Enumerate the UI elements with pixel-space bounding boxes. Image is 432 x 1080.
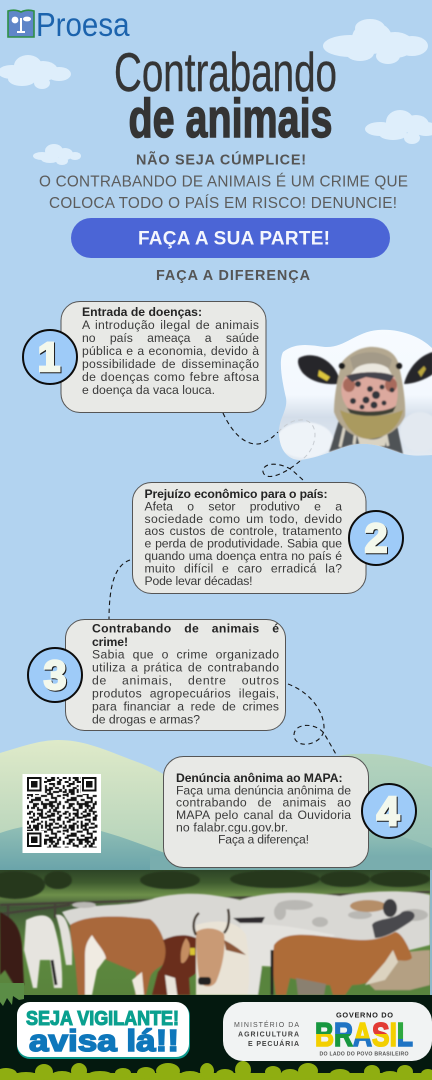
fence xyxy=(0,890,430,918)
text block: step 4: MAPA pelo canal da Ouvidoria xyxy=(176,808,351,822)
badge: number 1 xyxy=(23,330,77,384)
trees xyxy=(0,870,430,899)
badge: seja vigilante xyxy=(17,1002,190,1059)
snow xyxy=(277,422,333,458)
text block: step 3: Sabia que o crime organizado xyxy=(92,648,279,662)
photo: cow close-up xyxy=(279,330,432,460)
panel: step 4 xyxy=(164,756,368,868)
subtitle: O CONTRABANDO DE ANIMAIS É UM CRIME QUE xyxy=(39,174,408,190)
brown cow xyxy=(70,917,166,995)
badge: government logos: MINISTÉRIO DA xyxy=(234,1020,299,1029)
central cow xyxy=(196,921,249,995)
badge: number 4 xyxy=(362,784,416,838)
qr code xyxy=(22,774,101,853)
badge: number 2: 2 xyxy=(365,515,387,561)
text block: step 4: contrabando de animais ao xyxy=(176,796,351,810)
neck xyxy=(329,420,403,454)
back herd xyxy=(62,891,430,950)
text block: step 3: para financiar a rede de crimes xyxy=(92,700,279,714)
dashed connector: step 2 to step 3 xyxy=(109,560,130,620)
panel: step 2 xyxy=(132,482,366,594)
badge: seja vigilante: avisa lá!! xyxy=(29,1023,179,1058)
subtitle: NÃO SEJA CÚMPLICE! xyxy=(136,150,306,168)
badge: number 2 xyxy=(349,511,403,565)
badge: number 3 xyxy=(28,648,82,702)
text block: step 4: Faça a diferença! xyxy=(218,833,309,847)
text block: step 4 xyxy=(176,771,351,847)
badge: number 3: 3 xyxy=(44,652,66,698)
subtitle: COLOCA TODO O PAÍS EM RISCO! DENUNCIE! xyxy=(49,195,397,212)
text block: step 1 xyxy=(82,305,259,397)
text block: step 1: no país ameaça a saúde xyxy=(82,331,259,345)
foreground brown cow xyxy=(273,932,412,995)
badge: government logos: DO LADO DO POVO BRASILEIRO xyxy=(320,1052,408,1058)
dashed connector: step 1 to step 2 xyxy=(223,413,303,480)
badge: seja vigilante: SEJA VIGILANTE! xyxy=(26,1008,179,1030)
dark brown left cow xyxy=(0,912,24,985)
white cow behind xyxy=(240,924,335,995)
dark red cow xyxy=(152,935,198,995)
button: faça a sua parte xyxy=(71,218,390,258)
panel: step 1 xyxy=(61,302,266,412)
cloud: top left xyxy=(0,55,71,89)
logo: Brasil: BRASIL xyxy=(315,1016,413,1053)
text block: step 1: de doenças como febre aftosa xyxy=(82,370,259,384)
subheading: FAÇA A DIFERENÇA xyxy=(156,268,311,284)
foliage: corner xyxy=(0,983,24,1006)
white rear cow xyxy=(24,915,62,988)
logo: Proesa: Proesa xyxy=(36,6,130,43)
text block: step 3: crime! xyxy=(92,635,128,649)
button: faça a sua parte: FAÇA A SUA PARTE! xyxy=(138,228,330,250)
text block: step 2: Prejuízo econômico para o país: xyxy=(144,487,328,501)
text block: step 2: Pode levar décadas! xyxy=(144,574,252,588)
light strip at right edge xyxy=(430,870,432,995)
muzzle xyxy=(341,372,398,413)
foliage: bottom bushes xyxy=(0,1061,432,1080)
text block: step 1: A introdução ilegal de animais xyxy=(82,318,259,332)
faint dashed connector over photo xyxy=(278,420,315,461)
text block: step 2: muito difícil e caro erradicá la? xyxy=(144,561,342,575)
text block: step 4: Faça uma denúncia anônima de xyxy=(176,783,351,797)
text block: step 3: de drogas e armas? xyxy=(92,713,200,727)
badge: government logos: E PECUÁRIA xyxy=(248,1039,299,1048)
badge: government logos: GOVERNO DO xyxy=(336,1010,393,1020)
cloud: top right xyxy=(323,19,428,64)
ears xyxy=(298,355,340,384)
jaw xyxy=(340,410,403,439)
title: de animais xyxy=(128,87,332,149)
grass below herd xyxy=(258,968,410,995)
badge: number 4: 4 xyxy=(377,788,400,834)
text block: step 1: possibilidade de disseminação xyxy=(82,357,259,371)
text block: step 2: aos custos de controle, tratamento xyxy=(144,524,342,538)
badge: government logos xyxy=(223,1002,432,1061)
text block: step 3: de animais, dentre outros xyxy=(92,674,279,688)
text block: step 1: e doença da vaca louca. xyxy=(82,383,215,397)
head xyxy=(334,347,405,439)
badge: government logos: AGRICULTURA xyxy=(238,1032,299,1038)
text block: step 3: produtos agropecuários ilegais, xyxy=(92,687,279,701)
subtitle xyxy=(39,150,408,212)
icon: book xyxy=(8,10,34,37)
footer band xyxy=(0,995,432,1080)
hills xyxy=(0,740,432,870)
text block: step 1: pública e a economia, devido à xyxy=(82,344,259,358)
panel: step 3 xyxy=(66,620,286,730)
title xyxy=(114,41,337,149)
text block: step 4: Denúncia anônima ao MAPA: xyxy=(176,771,342,785)
dashed connector: step 3 to step 4 xyxy=(288,684,337,756)
text block: step 2: e perda de produtividade. Sabia que xyxy=(144,537,342,551)
text block: step 2: Afeta o setor produtivo e a xyxy=(144,500,342,514)
text block: step 2 xyxy=(144,487,342,588)
text block: step 2: quando uma doença entra no país é xyxy=(144,549,342,563)
text block: step 1: Entrada de doenças: xyxy=(82,305,202,319)
text block: step 3: Contrabando de animais é xyxy=(92,622,279,636)
cloud: small left xyxy=(33,144,81,165)
text block: step 2: sociedade como um todo, devido xyxy=(144,512,342,526)
title: Contrabando xyxy=(114,41,337,103)
text block: step 4: no falabr.cgu.gov.br. xyxy=(176,820,288,834)
text block: step 3: utiliza a prática de contrabando xyxy=(92,661,279,675)
text block: step 3 xyxy=(92,622,279,727)
photo: herd of cattle xyxy=(0,870,430,1000)
grey cow xyxy=(372,911,415,938)
badge: number 1: 1 xyxy=(38,334,60,380)
tan cow right xyxy=(365,950,430,990)
cloud: right xyxy=(365,110,432,144)
